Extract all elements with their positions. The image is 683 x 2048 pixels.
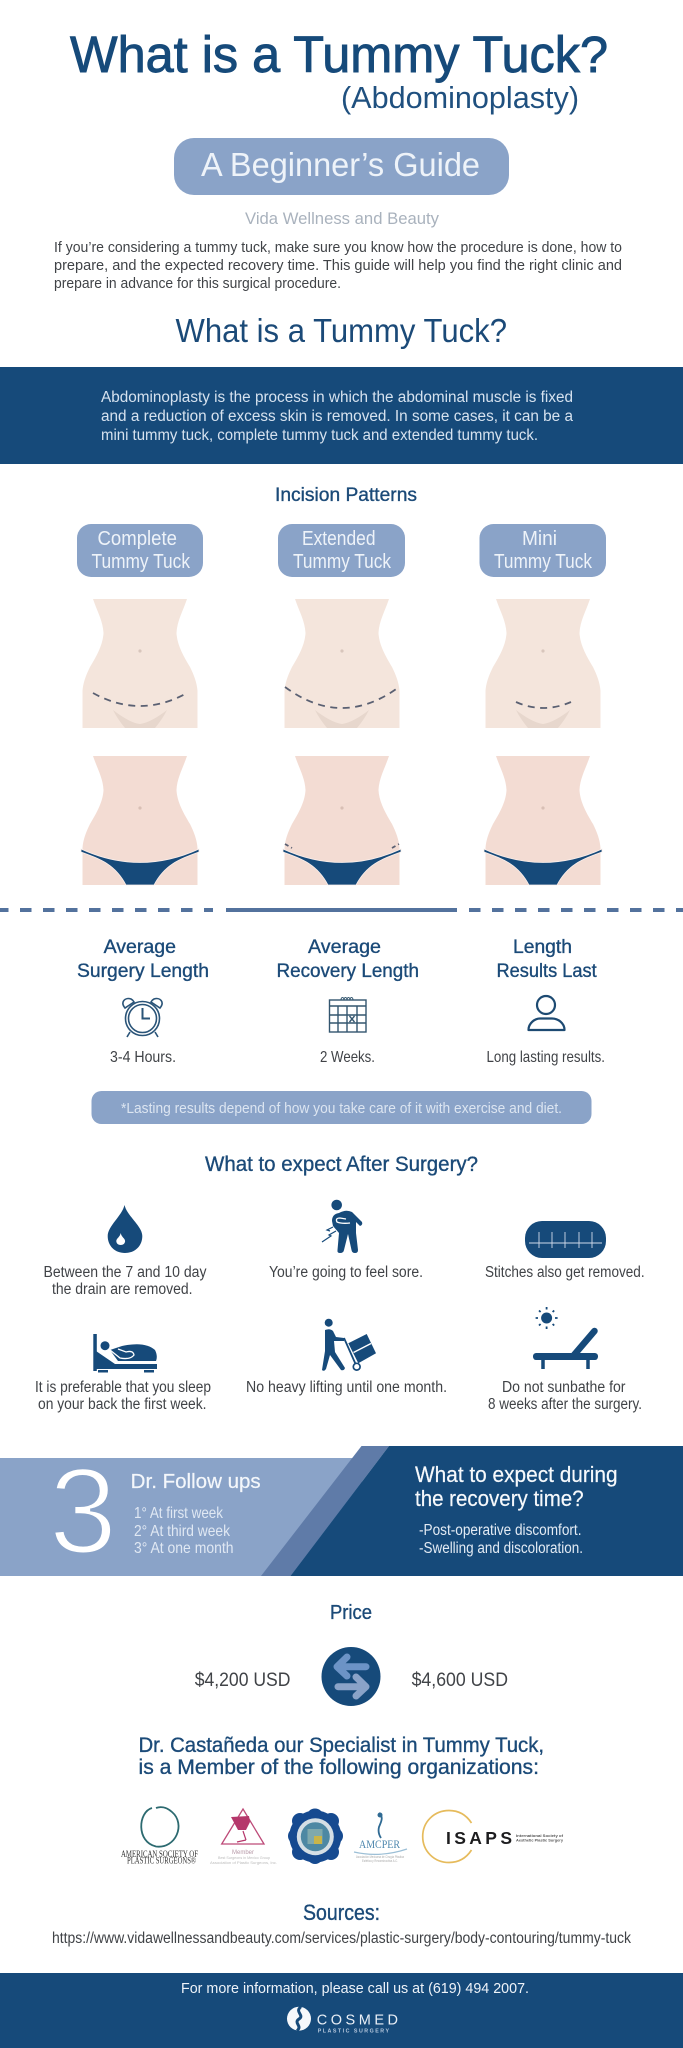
item: no sunbathing bbox=[488, 1307, 642, 1413]
footer: For more information, please call us at (619) 494 2007. bbox=[181, 1980, 529, 1997]
logo: cosmed: COSMED bbox=[317, 2012, 398, 2028]
item: no sunbathing: 8 weeks after the surgery. bbox=[488, 1396, 642, 1413]
stat: surgery length: Average bbox=[104, 937, 176, 958]
stat: recovery length bbox=[276, 937, 419, 1066]
item: sleeping position: on your back the first week. bbox=[38, 1396, 206, 1413]
sources: Sources: bbox=[303, 1900, 380, 1925]
stat: results last: Results Last bbox=[496, 961, 597, 982]
label: complete tummy tuck bbox=[77, 524, 203, 577]
logo: amcper: Asociación Mexicana de Cirugía Plástica bbox=[356, 1855, 405, 1859]
icon: person in bed bbox=[93, 1334, 157, 1372]
logo: american society of plastic surgeons: PLASTIC SURGEONS® bbox=[127, 1856, 196, 1866]
stat: recovery length: Average bbox=[308, 937, 381, 958]
item: drain removal: Between the 7 and 10 day bbox=[44, 1264, 207, 1281]
definition band bbox=[0, 367, 683, 464]
sources: https://www.vidawellnessandbeauty.com/services/plastic-surgery/body-contouring/tummy-tuck bbox=[52, 1930, 631, 1947]
heading: what is a tummy tuck: What is a Tummy Tuck? bbox=[176, 312, 507, 349]
logo: american society of plastic surgeons: AMERICAN SOCIETY OF bbox=[121, 1849, 198, 1859]
label: complete tummy tuck: Tummy Tuck bbox=[92, 551, 191, 573]
heading: memberships bbox=[138, 1733, 544, 1779]
price range bbox=[195, 1647, 508, 1706]
item: drain removal: the drain are removed. bbox=[52, 1281, 192, 1298]
intro paragraph: prepare in advance for this surgical procedure. bbox=[54, 275, 341, 292]
stat: surgery length bbox=[77, 937, 209, 1066]
stat: results last bbox=[486, 937, 605, 1066]
note pill bbox=[92, 1091, 592, 1124]
sources bbox=[52, 1900, 631, 1947]
icon: person with hand truck bbox=[322, 1319, 376, 1371]
item: stitches: Stitches also get removed. bbox=[485, 1264, 645, 1281]
icon: sun lounger bbox=[533, 1331, 598, 1369]
footer bbox=[0, 1973, 683, 2048]
icon: sore person bbox=[322, 1200, 362, 1253]
icon: water drop bbox=[108, 1205, 142, 1253]
author: Vida Wellness and Beauty bbox=[245, 209, 439, 228]
stat: surgery length: Surgery Length bbox=[77, 961, 209, 982]
definition band: Abdominoplasty is the process in which the abdominal muscle is fixed bbox=[101, 389, 573, 406]
logo: cosmed: PLASTIC SURGERY bbox=[318, 2029, 389, 2035]
intro paragraph: prepare, and the expected recovery time. This guide will help you find the right clinic and bbox=[54, 257, 622, 274]
panel: follow ups: Dr. Follow ups bbox=[131, 1471, 261, 1493]
intro paragraph: If you’re considering a tummy tuck, make sure you know how the procedure is done, how to bbox=[54, 239, 622, 256]
item: sleeping position bbox=[35, 1334, 211, 1413]
item: no heavy lifting: No heavy lifting until one month. bbox=[246, 1379, 447, 1396]
label: extended tummy tuck: Tummy Tuck bbox=[293, 551, 392, 573]
icon: sun bbox=[536, 1307, 558, 1329]
icon: person bbox=[528, 996, 564, 1030]
stat: surgery length: 3-4 Hours. bbox=[110, 1049, 176, 1066]
icon: exchange arrows bbox=[322, 1647, 380, 1706]
label: complete tummy tuck: Complete bbox=[98, 528, 177, 550]
icon: alarm clock bbox=[123, 999, 162, 1037]
price range: $4,600 USD bbox=[412, 1669, 508, 1691]
item: no heavy lifting bbox=[246, 1319, 447, 1396]
note pill: *Lasting results depend of how you take care of it with exercise and diet. bbox=[121, 1100, 562, 1117]
panel: follow ups: 3 bbox=[49, 1443, 117, 1579]
title bbox=[70, 26, 608, 115]
logo: isaps: ISAPS bbox=[446, 1828, 512, 1848]
item: no sunbathing: Do not sunbathe for bbox=[502, 1379, 626, 1396]
torso: extended incision bbox=[284, 599, 400, 728]
stat: recovery length: 2 Weeks. bbox=[320, 1049, 375, 1066]
icon: calendar bbox=[330, 998, 366, 1032]
logo: pink triangle member bbox=[210, 1809, 277, 1865]
item: soreness bbox=[269, 1200, 423, 1281]
logo: pink triangle member: Best Surgeons in Mexico Group bbox=[218, 1855, 271, 1860]
heading: memberships: Dr. Castañeda our Specialist in Tummy Tuck, bbox=[138, 1733, 544, 1757]
heading: price: Price bbox=[330, 1602, 372, 1624]
logo: american society of plastic surgeons bbox=[121, 1807, 198, 1866]
panel: recovery time: -Swelling and discoloration. bbox=[419, 1540, 583, 1557]
logo: pink triangle member: Association of Plastic Surgeons, Inc. bbox=[210, 1860, 277, 1865]
torso: complete incision bbox=[82, 599, 198, 728]
panel: follow ups bbox=[0, 1443, 362, 1579]
panel: recovery time: -Post-operative discomfort. bbox=[419, 1522, 582, 1539]
label: extended tummy tuck: Extended bbox=[302, 528, 376, 550]
label: mini tummy tuck bbox=[480, 524, 606, 577]
logo: cosmed bbox=[287, 2007, 398, 2035]
panel: recovery time bbox=[261, 1446, 683, 1576]
logo: isaps: International Society of bbox=[516, 1833, 564, 1838]
heading: memberships: is a Member of the following organizations: bbox=[138, 1755, 539, 1779]
torso with underwear: extended bbox=[283, 756, 401, 885]
item: drain removal bbox=[44, 1205, 207, 1298]
logo: pink triangle member: Member bbox=[232, 1850, 254, 1856]
definition band: and a reduction of excess skin is removed. In some cases, it can be a bbox=[101, 408, 573, 425]
panel: recovery time: What to expect during bbox=[415, 1462, 618, 1487]
icon: stitches bbox=[525, 1221, 606, 1258]
torso with underwear: mini bbox=[484, 756, 602, 885]
panel: follow ups: 1° At first week bbox=[134, 1505, 224, 1522]
logo: blue seal bbox=[288, 1808, 343, 1864]
panel: follow ups: 2° At third week bbox=[134, 1523, 231, 1540]
stat: results last: Long lasting results. bbox=[486, 1049, 605, 1066]
logo: isaps: Aesthetic Plastic Surgery bbox=[516, 1838, 564, 1842]
item: soreness: You’re going to feel sore. bbox=[269, 1264, 423, 1281]
label: extended tummy tuck bbox=[278, 524, 405, 577]
panel: follow ups: 3° At one month bbox=[134, 1540, 234, 1557]
torso with underwear: complete bbox=[81, 756, 199, 885]
stat: results last: Length bbox=[513, 937, 572, 958]
heading: after surgery: What to expect After Surgery? bbox=[205, 1153, 478, 1176]
title: (Abdominoplasty) bbox=[341, 80, 579, 115]
intro paragraph bbox=[54, 239, 622, 292]
title: What is a Tummy Tuck? bbox=[70, 26, 608, 83]
item: stitches bbox=[485, 1221, 645, 1281]
guide pill bbox=[174, 138, 509, 195]
label: mini tummy tuck: Tummy Tuck bbox=[494, 551, 593, 573]
logo: amcper bbox=[354, 1812, 407, 1863]
panel: recovery time: the recovery time? bbox=[415, 1486, 584, 1511]
guide pill: A Beginner’s Guide bbox=[201, 146, 480, 183]
label: mini tummy tuck: Mini bbox=[522, 528, 557, 550]
definition band: mini tummy tuck, complete tummy tuck and extended tummy tuck. bbox=[101, 427, 538, 444]
stat: recovery length: Recovery Length bbox=[276, 961, 419, 982]
heading: incision patterns: Incision Patterns bbox=[275, 485, 417, 506]
logo: isaps bbox=[423, 1810, 564, 1862]
price range: $4,200 USD bbox=[195, 1669, 290, 1691]
logo: amcper: Estética y Reconstructiva A.C. bbox=[362, 1859, 398, 1863]
logo: amcper: AMCPER bbox=[359, 1837, 400, 1851]
torso: mini incision bbox=[486, 599, 600, 728]
item: sleeping position: It is preferable that you sleep bbox=[35, 1379, 211, 1396]
